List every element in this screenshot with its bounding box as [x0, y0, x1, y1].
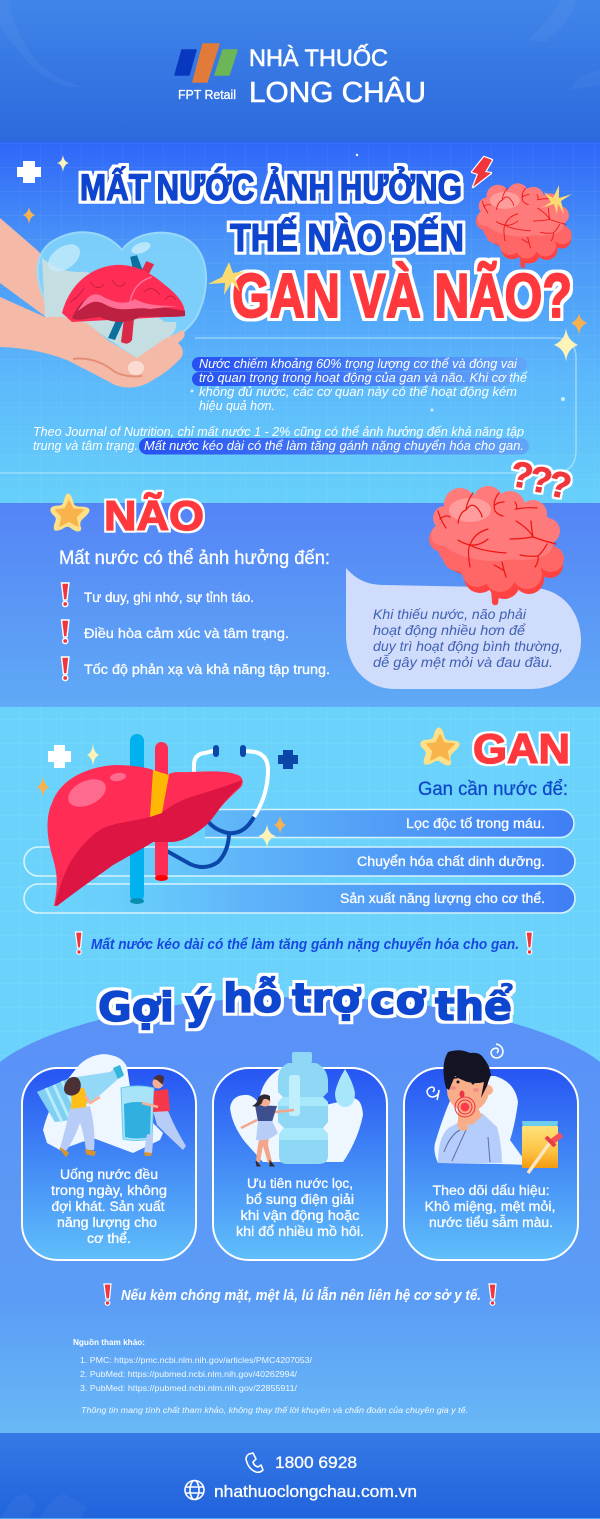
icon: exclamation [62, 657, 69, 681]
icon: star Gan [421, 728, 459, 765]
logo: brand name: NHÀ THUỐC [249, 44, 388, 72]
heading: Gan: GAN [473, 725, 570, 772]
panel: tip card 2 [213, 1052, 387, 1260]
icon: question marks: ? [545, 462, 575, 507]
icon: dizzy swirls [427, 1044, 503, 1100]
text block: references: Thông tin mang tính chất tham khảo, không thay thế lời khuyên và chẩn đoán của chuyên gia y tế. [81, 1406, 468, 1415]
heading: tips: trợ [292, 976, 362, 1022]
panel: tip card 3 [404, 1044, 578, 1260]
panel: tip card 3: nước tiểu sẫm màu. [429, 1215, 553, 1230]
list: Não effects: Tư duy, ghi nhớ, sự tỉnh táo. [84, 590, 254, 605]
icon: exclamation [62, 620, 69, 644]
panel: tip card 2: khi vận động hoặc [240, 1208, 360, 1223]
title [80, 166, 572, 331]
icon: question marks: ? [527, 458, 555, 502]
heading: tips [98, 976, 513, 1031]
icon: sparkles around title [23, 155, 587, 362]
panel: tip card 1: trong ngày, không [51, 1183, 167, 1198]
text block: intro: hiệu quả hơn. [199, 398, 275, 413]
text block: intro: Mất nước kéo dài có thể làm tăng gánh nặng chuyển hóa cho gan. [144, 438, 524, 453]
icon: phone [246, 1453, 263, 1472]
icon: globe [185, 1480, 204, 1500]
callout: speech bubble: dễ gây mệt mỏi và đau đầu. [373, 654, 553, 670]
heading: Não: NÃO [104, 492, 204, 539]
panel: tip card 3: Khô miệng, mệt mỏi, [424, 1199, 556, 1214]
text: hotline: 1800 6928 [275, 1454, 357, 1472]
panel: tip card 2: Ưu tiên nước lọc, [247, 1176, 353, 1191]
icon: star Não [51, 494, 89, 531]
icon: white plus [17, 161, 41, 183]
icon: sparkles around liver [37, 744, 286, 848]
bars: Gan list: Sản xuất năng lượng cho cơ thể. [340, 891, 545, 906]
panel: Não [0, 503, 600, 707]
logo: brand name: LONG CHÂU [249, 76, 426, 109]
panel: tip card 1 [22, 1054, 196, 1260]
list: Não effects: Tốc độ phản xạ và khả năng tập trung. [84, 662, 330, 677]
callout: speech bubble [346, 568, 581, 689]
callout: speech bubble: Khi thiếu nước, não phải [373, 606, 527, 622]
illustration: man with sore throat and urine sample [434, 1050, 563, 1173]
list: Não effects [62, 583, 330, 681]
callout: Gan warning: Mất nước kéo dài có thể làm tăng gánh nặng chuyển hóa cho gan. [91, 936, 519, 953]
panel: tip card 1: đợi khát. Sản xuất [52, 1199, 165, 1214]
heading: tips: thể [435, 982, 513, 1030]
panel: tip card 1: Uống nước đều [60, 1167, 158, 1182]
text block: references: 2. PubMed: https://pubmed.ncbi.nlm.nih.gov/40262994/ [80, 1370, 298, 1379]
bars: Gan list: Chuyển hóa chất dinh dưỡng. [357, 854, 545, 869]
text: Gan intro: Gan cần nước để: [418, 779, 568, 800]
callout: seek medical help: Nếu kèm chóng mặt, mệt lả, lú lẫn nên liên hệ cơ sở y tế. [121, 1287, 481, 1304]
logo: FPT Retail [175, 44, 237, 102]
text: Não intro: Mất nước có thể ảnh hưởng đến: [59, 548, 330, 569]
logo: brand name [249, 44, 426, 109]
icon: medical plus signs [48, 745, 298, 769]
panel: tip card 1: cơ thể. [87, 1231, 131, 1246]
panel: tip card 1: năng lượng cho [57, 1215, 157, 1230]
title: MẤT NƯỚC ẢNH HƯỞNG [80, 166, 462, 208]
panel: Gan background [0, 707, 600, 1067]
icon: yellow bursts [208, 185, 572, 295]
text block: references: Nguồn tham khảo: [73, 1338, 145, 1347]
callout: speech bubble: hoạt động nhiều hơn để [373, 622, 526, 638]
bars: Gan list: Lọc độc tố trong máu. [406, 816, 545, 831]
icon: exclamation [62, 583, 69, 607]
illustration: brain large [429, 486, 564, 605]
bars: Gan list [24, 810, 575, 913]
text block: references: 1. PMC: https://pmc.ncbi.nlm.nih.gov/articles/PMC4207053/ [80, 1356, 313, 1365]
panel: hero background [0, 142, 600, 503]
illustration: people with water bottle and glass [37, 1054, 186, 1156]
illustration: hands holding heart and liver [0, 218, 206, 388]
heading: tips: Gợi [98, 985, 174, 1031]
text block: intro: trung và tâm trạng. [33, 438, 138, 453]
title: THẾ NÀO ĐẾN [230, 216, 464, 260]
text block: intro: Nước chiếm khoảng 60% trọng lượng cơ thể và đóng vai [199, 356, 518, 371]
footer band [0, 1433, 600, 1519]
panel: tip card 2: khi đổ nhiều mồ hôi. [236, 1224, 364, 1239]
panel: tip card 3: Theo dõi dấu hiệu: [432, 1183, 550, 1198]
callout: speech bubble: duy trì hoạt động bình thường, [373, 638, 563, 654]
text: website: nhathuoclongchau.com.vn [214, 1483, 417, 1501]
illustration: woman with large water bottle [230, 1052, 363, 1166]
heading: tips: ý [185, 983, 212, 1029]
illustration: brain in title [476, 183, 572, 268]
icon: question marks [508, 453, 575, 507]
icon: question marks: ? [508, 453, 536, 497]
text block: references [73, 1338, 468, 1415]
text block: intro: Theo Journal of Nutrition, chỉ mất nước 1 - 2% cũng có thể ảnh hưởng đến khả năng tập [33, 424, 524, 439]
icon: lightning [472, 157, 492, 187]
list: Não effects: Điều hòa cảm xúc và tâm trạng. [84, 626, 289, 641]
heading: tips: hỗ [223, 976, 282, 1022]
header band [0, 0, 600, 142]
panel: tip card 2: bổ sung điện giải [246, 1192, 354, 1207]
text block: references: 3. PubMed: https://pubmed.ncbi.nlm.nih.gov/22855911/ [80, 1384, 298, 1393]
text block: intro: trò quan trọng trong hoạt động của gan và não. Khi cơ thể [199, 370, 528, 385]
panel: tips background [0, 997, 600, 1433]
text block: intro [33, 356, 529, 454]
illustration: liver with stethoscope [48, 734, 268, 906]
logo: FPT Retail: FPT Retail [178, 87, 236, 102]
heading: tips: cơ [370, 978, 427, 1024]
text block: intro: không đủ nước, các cơ quan này có thể hoạt động kém [199, 384, 517, 399]
